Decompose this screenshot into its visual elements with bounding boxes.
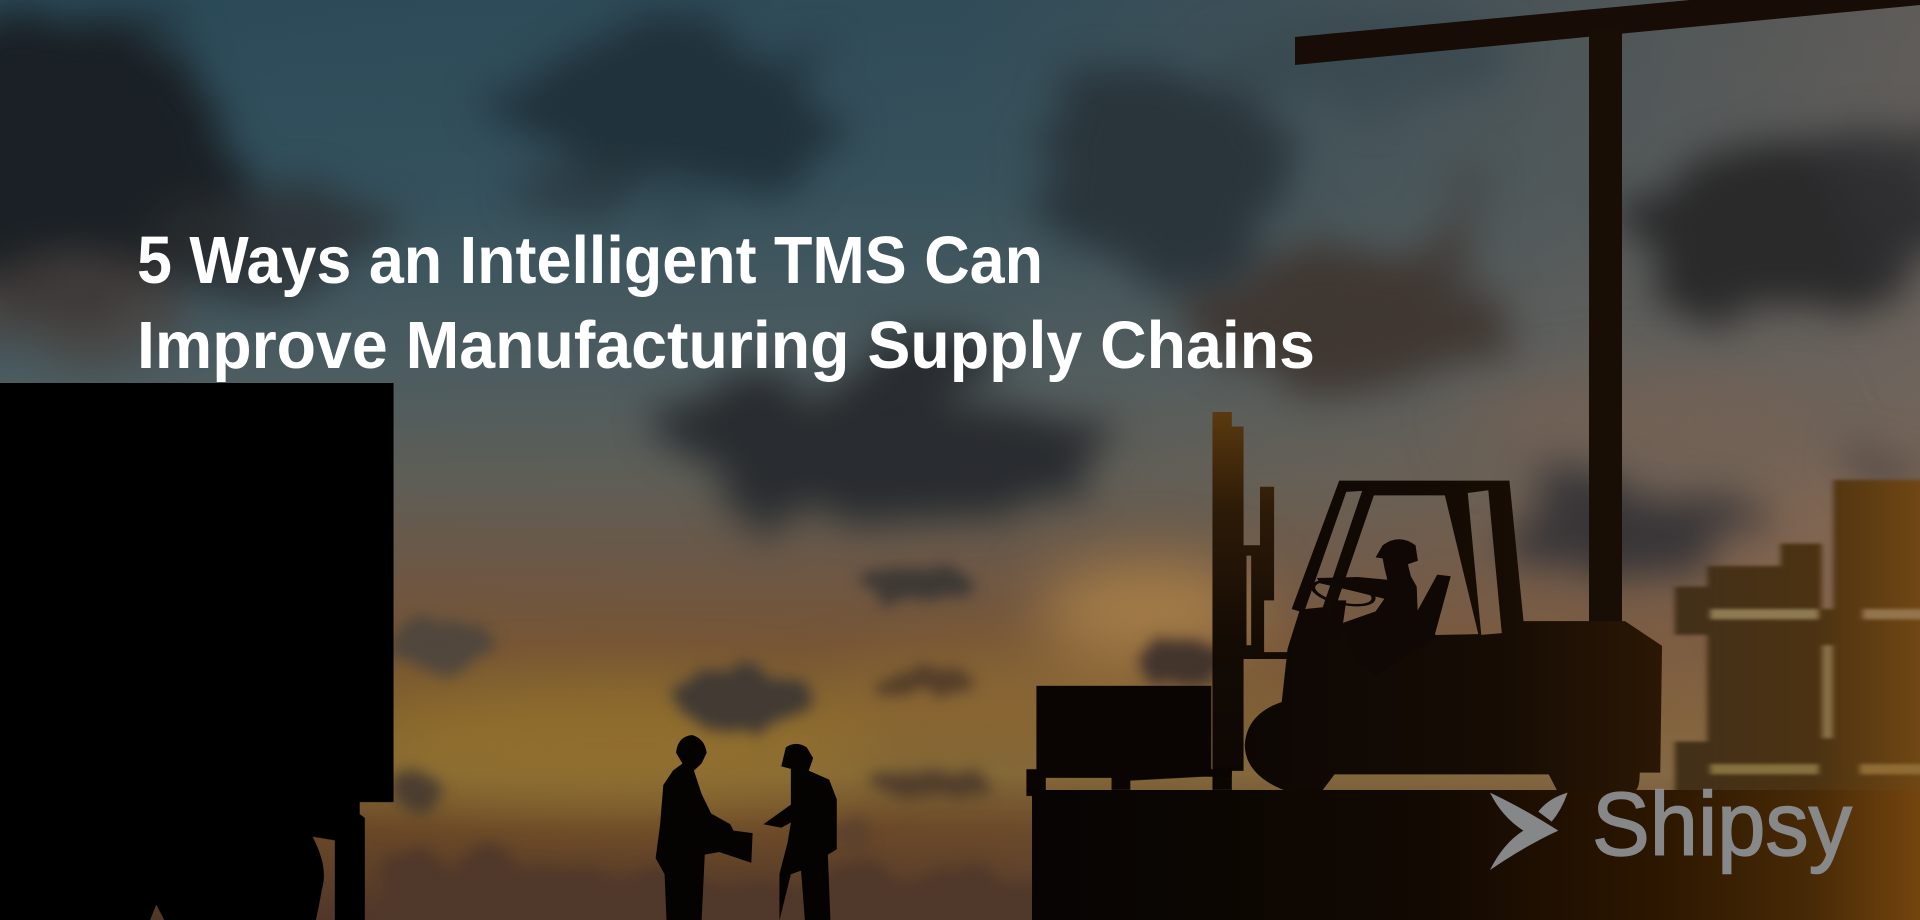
small low clouds	[390, 567, 1224, 849]
forklift cab and body	[1245, 481, 1662, 792]
raised ground platform	[1032, 790, 1920, 920]
forklift mast	[1212, 412, 1288, 790]
large dark clouds	[0, 15, 1920, 575]
forklift overhead beam and post	[1295, 0, 1920, 622]
cargo box	[1036, 686, 1211, 770]
title: Improve Manufacturing Supply Chains	[137, 308, 1315, 383]
title: 5 Ways an Intelligent TMS Can	[137, 223, 1043, 298]
logo wordmark: Shipsy	[1592, 775, 1852, 875]
truck silhouette	[0, 383, 394, 920]
forklift	[1026, 412, 1662, 796]
blurred background crates	[1675, 480, 1920, 793]
forklift driver	[1317, 539, 1451, 676]
steering wheel	[1307, 575, 1380, 610]
bottom cloud bank	[370, 842, 1040, 920]
logo icon	[1490, 793, 1568, 870]
fork and pallet	[1026, 769, 1232, 796]
two workers silhouette	[656, 735, 837, 920]
worker right	[763, 744, 837, 920]
horizon glow	[360, 375, 1920, 805]
worker left	[656, 735, 753, 920]
Shipsy logo	[1490, 775, 1852, 875]
